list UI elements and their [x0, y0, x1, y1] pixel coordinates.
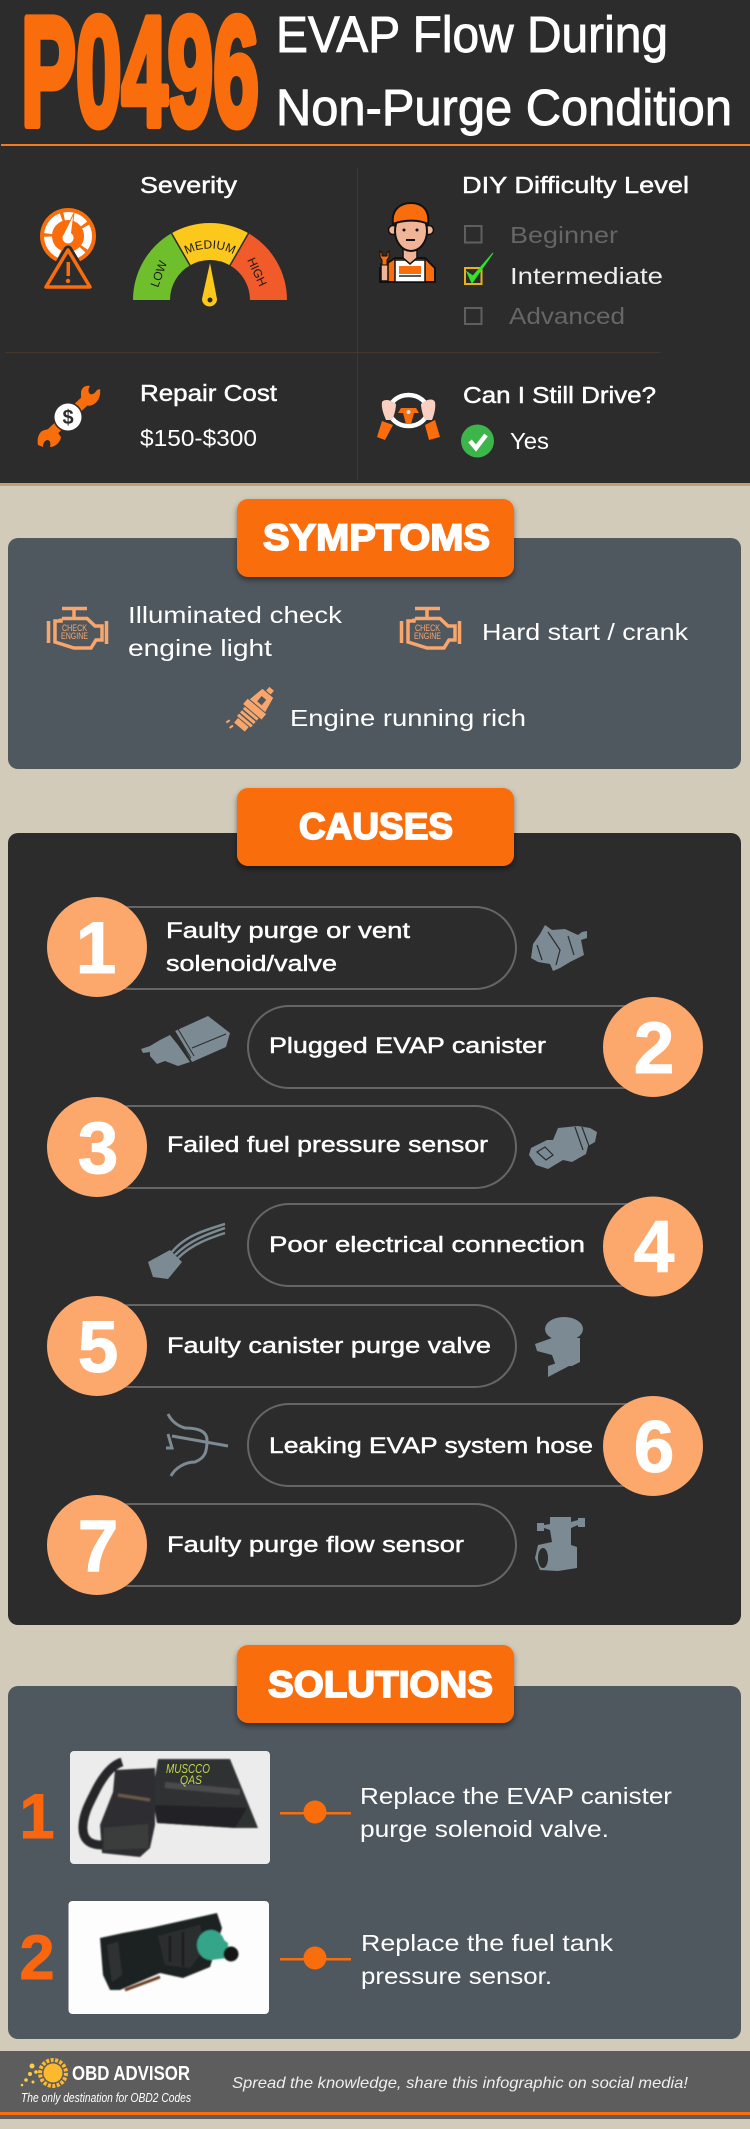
header panel	[0, 0, 750, 486]
cause 7: 7	[78, 1506, 118, 1587]
heading: symptoms	[237, 499, 514, 577]
cause 5	[47, 1296, 583, 1396]
gauge chart: HIGH	[244, 255, 270, 288]
icon: wrench and dollar	[38, 386, 100, 447]
icon: hose	[166, 1414, 228, 1476]
panel: symptoms	[8, 499, 741, 769]
cause 1	[47, 897, 587, 997]
icon: steering wheel with hands	[377, 395, 440, 440]
cause 1: Faulty purge or vent	[166, 918, 410, 943]
heading: solutions	[237, 1645, 514, 1723]
panel: causes	[8, 788, 741, 1625]
cause 6: Leaking EVAP system hose	[269, 1433, 593, 1458]
icon: pressure sensor	[529, 1126, 597, 1169]
tagline: The only destination for OBD2 Codes	[21, 2090, 191, 2105]
difficulty options: Beginner	[510, 222, 618, 248]
severity label: Severity	[140, 172, 238, 198]
cause 7	[47, 1495, 585, 1595]
icon: solenoid	[531, 925, 587, 971]
icon: check engine 1	[48, 608, 106, 648]
title: EVAP Flow During	[276, 6, 668, 63]
icon: purge valve	[535, 1317, 583, 1377]
icon: check engine 2: ENGINE	[414, 631, 441, 641]
icon: severity gauge warning	[40, 208, 96, 288]
can I still drive: Yes	[510, 428, 549, 454]
heading: causes: CAUSES	[299, 806, 453, 847]
cause 3: Failed fuel pressure sensor	[167, 1132, 488, 1157]
repair cost: $150-$300	[140, 425, 257, 451]
heading: solutions: SOLUTIONS	[268, 1664, 493, 1705]
symptom text 1: engine light	[128, 635, 273, 661]
icon: check engine 2: CHECK	[415, 623, 440, 633]
DIY difficulty heading: DIY Difficulty Level	[462, 172, 689, 198]
title	[276, 6, 732, 136]
footer	[0, 2051, 750, 2119]
gauge chart: MEDIUM	[184, 240, 236, 254]
cause 3: 3	[78, 1108, 118, 1189]
gauge chart: LOW	[148, 258, 170, 289]
cause 1: solenoid/valve	[166, 951, 337, 976]
cause 3	[47, 1097, 597, 1197]
cause 5: 5	[78, 1307, 118, 1388]
connector 1	[280, 1800, 351, 1824]
icon: check engine 1: ENGINE	[61, 631, 88, 641]
panel: solutions	[8, 1645, 741, 2039]
symptom text 1	[128, 602, 343, 661]
solution number 2: 2	[19, 1923, 55, 1993]
icon: logo gear	[21, 2060, 66, 2086]
heading: symptoms: SYMPTOMS	[263, 517, 490, 558]
cause 6: 6	[634, 1407, 674, 1488]
icon: wrench and dollar: $	[62, 407, 74, 429]
solution text 1: Replace the EVAP canister	[360, 1783, 672, 1809]
solution text 1: purge solenoid valve.	[360, 1816, 609, 1842]
icon: check engine 1: CHECK	[62, 623, 87, 633]
heading: causes	[237, 788, 514, 866]
cause 7: Faulty purge flow sensor	[167, 1532, 464, 1557]
icon: mechanic	[380, 203, 435, 282]
cause 5: Faulty canister purge valve	[167, 1333, 491, 1358]
solution number 1: 1	[19, 1782, 55, 1852]
solution text 2: Replace the fuel tank	[361, 1930, 614, 1956]
share message: Spread the knowledge, share this infographic on social media!	[232, 2075, 689, 2092]
solution text 1	[360, 1783, 672, 1842]
repair cost: Repair Cost	[140, 380, 278, 406]
connector 2	[280, 1946, 351, 1970]
cause 1: 1	[76, 908, 116, 989]
difficulty options: Advanced	[509, 303, 625, 329]
icon: flow sensor	[535, 1517, 585, 1571]
photo: EVAP canister	[70, 1751, 270, 1864]
cause 6	[166, 1396, 703, 1496]
title: Non-Purge Condition	[276, 79, 732, 136]
can I still drive: Can I Still Drive?	[463, 382, 656, 408]
photo: pressure sensor	[68, 1901, 269, 2014]
logo name: OBD ADVISOR	[72, 2063, 190, 2085]
solution text 2: pressure sensor.	[361, 1963, 552, 1989]
cause 4	[148, 1196, 703, 1296]
cause 2: Plugged EVAP canister	[269, 1033, 546, 1058]
cause 2: 2	[634, 1008, 674, 1089]
gauge chart	[133, 223, 287, 306]
icon: check engine 2	[402, 608, 460, 648]
difficulty options: Intermediate	[510, 263, 663, 289]
can I still drive	[461, 382, 656, 458]
cause 4: 4	[634, 1207, 675, 1288]
symptom text 2: Hard start / crank	[482, 619, 689, 645]
difficulty options	[465, 222, 663, 329]
icon: wire connector	[148, 1224, 225, 1279]
symptom text 1: Illuminated check	[128, 602, 343, 628]
solution text 2	[361, 1930, 614, 1989]
icon: spark plug	[225, 680, 281, 740]
cause 4: Poor electrical connection	[269, 1232, 585, 1257]
photo: EVAP canister: QAS	[180, 1773, 202, 1787]
photo: EVAP canister: MUSCCO	[166, 1761, 210, 1776]
symptom text 3: Engine running rich	[290, 705, 526, 731]
repair cost	[140, 380, 278, 451]
cause 2	[141, 997, 703, 1097]
icon: canister	[141, 1016, 230, 1066]
